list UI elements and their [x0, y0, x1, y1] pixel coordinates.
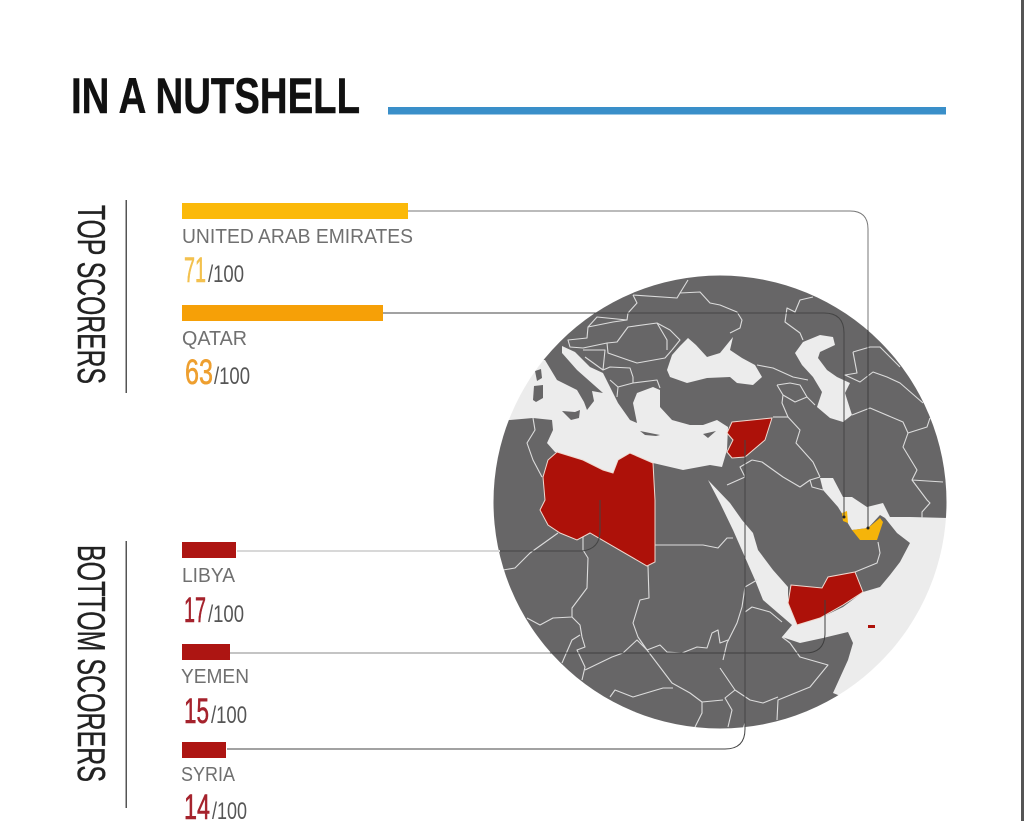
entry: Libya — [182, 542, 244, 630]
connector: United Arab Emirates — [408, 211, 870, 530]
entry: Qatar: /100 — [214, 363, 250, 390]
map: Libya — [540, 452, 655, 566]
map: Red Sea, Gulf and Indian Ocean — [708, 478, 946, 696]
entry: Yemen: YEMEN — [181, 666, 249, 688]
map: Syria — [727, 418, 772, 458]
connector: Syria — [227, 440, 745, 749]
entry: United Arab Emirates: UNITED ARAB EMIRATES — [182, 226, 413, 248]
map: Yemen — [788, 572, 863, 625]
map: Qatar — [842, 511, 848, 523]
entry: Yemen: 15 — [184, 692, 209, 731]
map: Mediterranean Sea — [508, 346, 728, 472]
entry: Libya: 17 — [184, 591, 206, 630]
entry: Libya: LIBYA — [182, 565, 236, 587]
title — [71, 68, 946, 124]
entry: United Arab Emirates: 71 — [184, 251, 206, 290]
map: United Arab Emirates — [852, 518, 883, 540]
entry: Yemen — [181, 644, 249, 731]
entry: United Arab Emirates: /100 — [208, 261, 244, 288]
connector: Libya — [237, 500, 600, 551]
entry: Qatar: 63 — [185, 353, 213, 392]
connector: Yemen — [230, 600, 825, 653]
entry: United Arab Emirates — [182, 203, 413, 290]
entry: Libya: /100 — [208, 601, 244, 628]
map: Black Sea — [667, 337, 762, 385]
section label: top scorers: TOP SCORERS — [69, 205, 112, 384]
map: Socotra — [868, 625, 875, 628]
map: globe — [480, 265, 960, 740]
map: islands — [533, 369, 716, 438]
entry: Qatar: QATAR — [182, 328, 247, 350]
title: IN A NUTSHELL — [71, 68, 360, 124]
entry: Syria: SYRIA — [181, 764, 236, 786]
entry: Yemen: /100 — [211, 702, 247, 729]
map: country borders — [503, 280, 943, 738]
map: Caspian Sea — [795, 335, 852, 422]
entry: Syria — [181, 742, 247, 821]
connector: Qatar — [383, 313, 846, 518]
entry: Qatar — [182, 305, 383, 392]
